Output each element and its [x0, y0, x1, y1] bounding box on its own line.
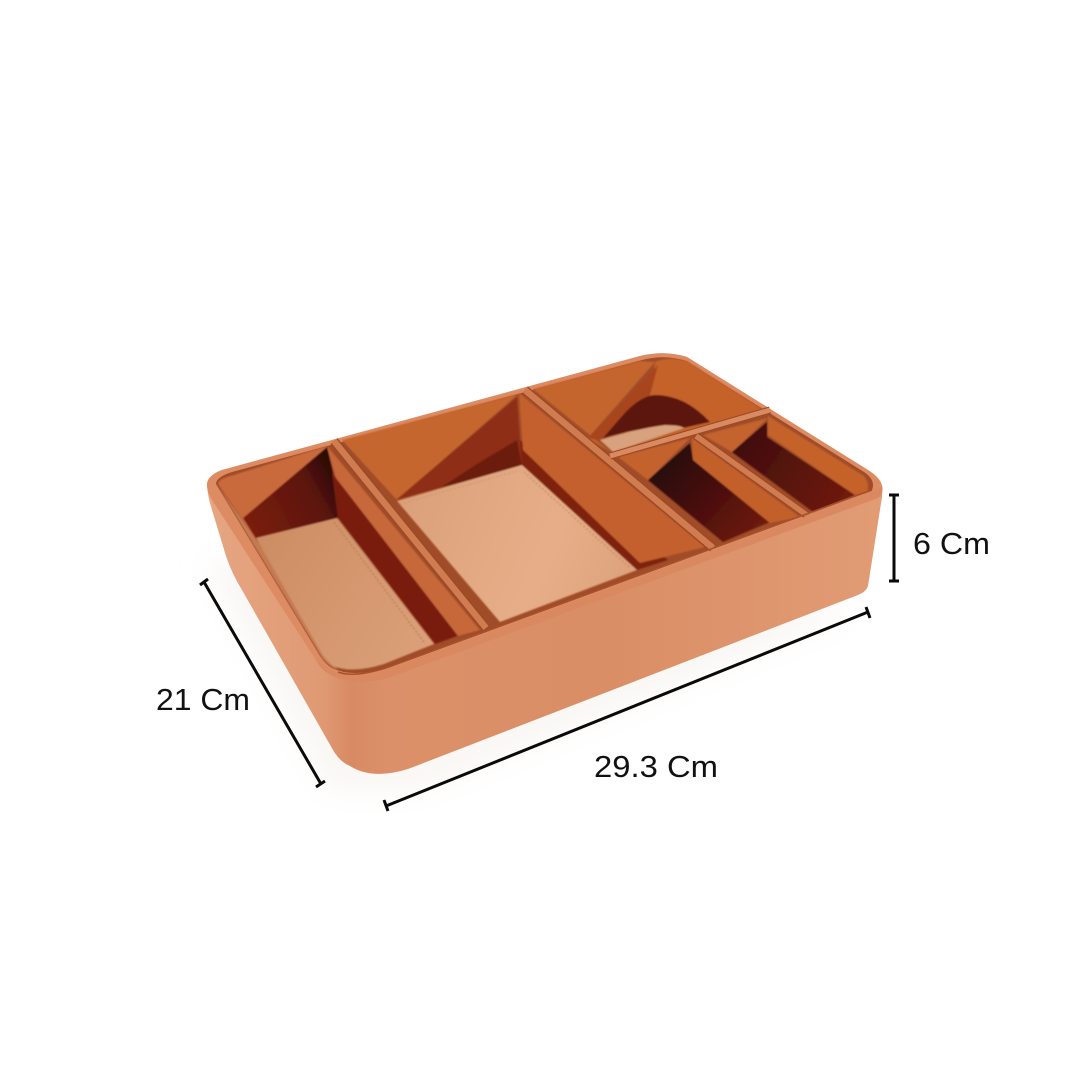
compartment 2: large centre — [342, 393, 705, 622]
rim inner outline — [216, 357, 873, 673]
floor — [397, 465, 637, 622]
dark interior — [603, 395, 710, 438]
floor stitching — [334, 522, 424, 642]
compartment 5: lower right small — [703, 416, 868, 512]
compartment 3: top right — [533, 359, 762, 453]
floor — [600, 425, 684, 452]
divider inner face — [327, 446, 480, 636]
measure line — [384, 607, 870, 811]
diagonal shadow — [588, 365, 658, 441]
dimension: depth 21 Cm — [156, 579, 325, 787]
side wall dark strip — [520, 440, 668, 570]
measure line — [200, 579, 325, 787]
back wall dark triangle — [396, 397, 522, 500]
far right wall — [612, 359, 762, 453]
front rim — [316, 486, 882, 682]
back wall lit — [618, 438, 690, 480]
label: 29.3 Cm — [594, 749, 718, 784]
back wall dark diagonal — [243, 447, 338, 542]
floor — [256, 518, 434, 670]
label: 6 Cm — [913, 526, 990, 561]
back wall lit — [342, 394, 518, 500]
rim top surface — [207, 353, 882, 679]
back wall lit — [703, 418, 768, 452]
floor stitching — [524, 472, 630, 568]
compartments — [218, 359, 868, 670]
dividers — [334, 390, 808, 628]
dark interior — [648, 443, 770, 542]
dark interior — [732, 422, 855, 512]
soft shadow under tray — [205, 560, 860, 790]
tray outer body — [207, 353, 882, 774]
divider: top right shelf — [610, 410, 770, 456]
divider: left and centre — [334, 441, 486, 628]
left wall strip — [218, 486, 338, 670]
measure line — [889, 495, 899, 581]
right wall face — [768, 416, 868, 495]
side wall dark — [332, 473, 460, 644]
divider: small boxes — [696, 436, 808, 516]
right divider face — [519, 393, 705, 563]
dimension: width 29.3 Cm — [384, 607, 870, 811]
compartment 4: lower small — [618, 438, 800, 542]
back wall lit — [218, 446, 338, 542]
dimension: height 6 Cm — [889, 495, 990, 581]
label: 21 Cm — [156, 682, 250, 717]
tray — [207, 353, 883, 774]
right wall face — [692, 438, 800, 523]
compartment 1: left narrow — [218, 446, 480, 670]
back wall lit — [533, 361, 655, 453]
divider: centre and right — [525, 390, 713, 548]
